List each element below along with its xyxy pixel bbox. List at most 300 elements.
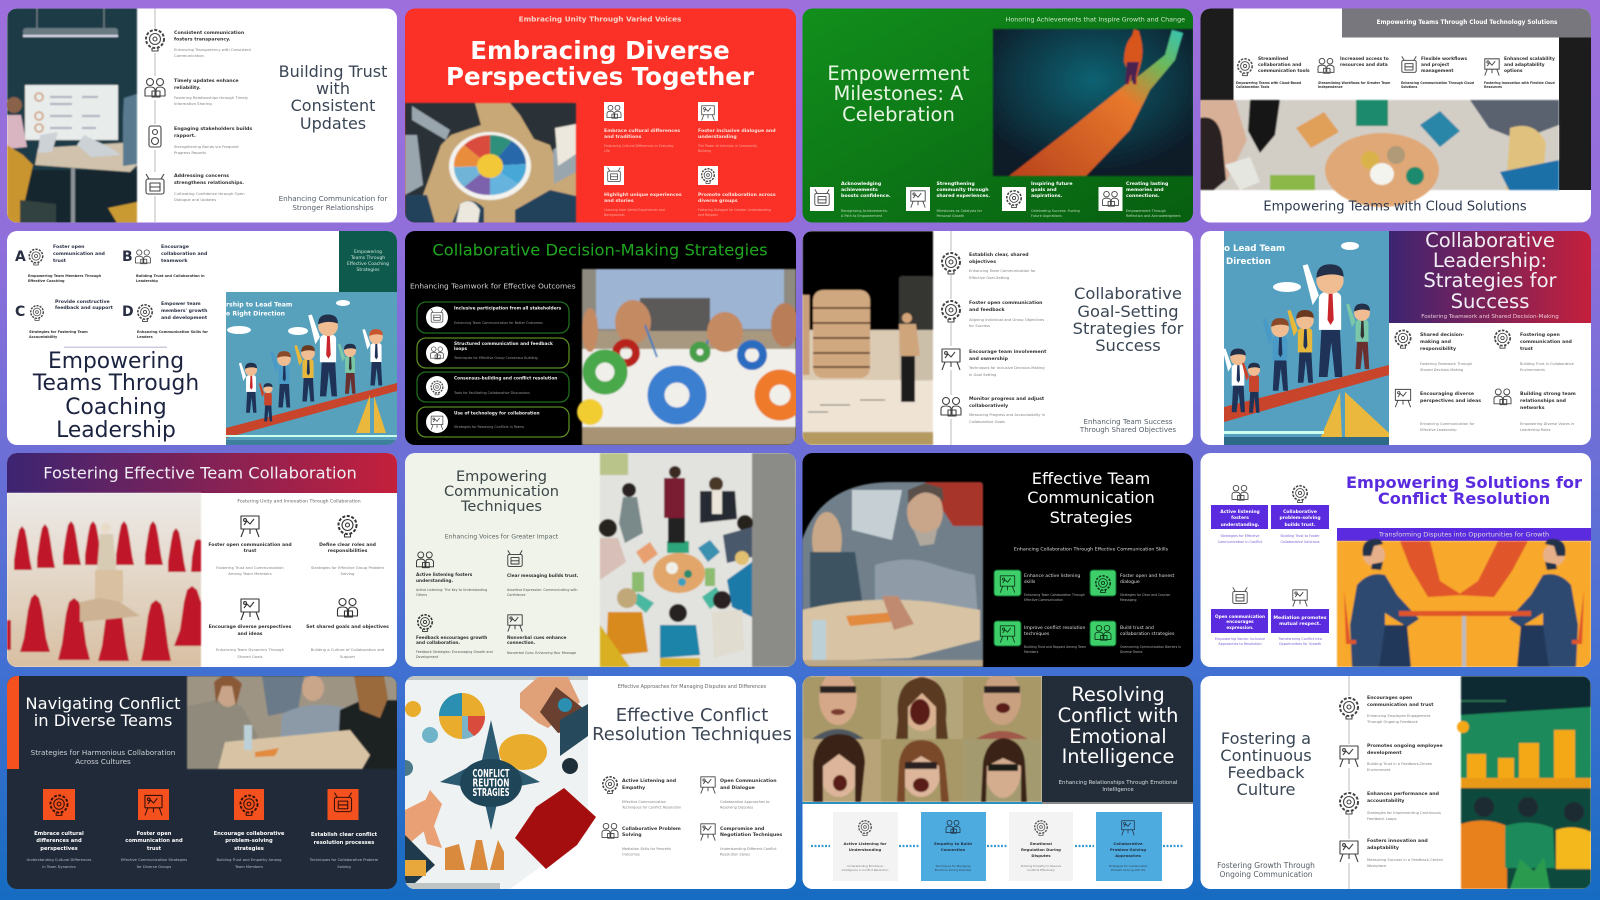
item: memories: Empowerment Through [1126,209,1166,213]
item text: performance: accountability [1367,798,1404,804]
item: diverse perspectives [209,599,292,658]
icon: open communication [939,299,963,323]
item: trust and collaboration: collaboration strategies [1120,630,1175,636]
step: empathy: Connection [941,846,966,852]
item: shared decision-making: Fostering Teamwork Through [1420,362,1472,366]
item text: monitor progress: Monitor progress and adjust [969,396,1045,402]
photo: red pawns around a leader [7,493,201,667]
item: active listening: Active listening fosters [416,572,473,578]
item: active listening: Effective Communication [1024,598,1063,602]
step: collaborative problem-solving: Problem-Solving with EQ [1111,868,1146,872]
item: access to resources: Streamlining Workflows for Greater Team [1318,81,1390,85]
image: cartoon team on a rising plank: rship to Lead Team [226,302,292,308]
item: collaborative problem solving [602,823,681,856]
title: Empowering [456,468,547,484]
panel: Resolving Conflict with Emotional Intelligence [802,671,1193,889]
item: streamlined collaboration [1236,56,1310,89]
item: problem-solving: problem-solving [225,838,273,844]
subtitle: Ongoing Communication [1219,870,1313,878]
item: conflict resolution: Improve conflict resolution [1024,624,1085,630]
item: clear messaging [507,550,579,597]
timeline line [154,8,156,222]
card: collaborative problem-solving: problem-solving [1279,514,1321,520]
item text: addressing concerns: Addressing concerns [174,172,229,178]
item: community: community through [936,186,989,192]
step: collaborative problem-solving: Problem-Solving [1110,846,1146,852]
card: active listening: understanding. [1221,522,1260,528]
item: clear messaging: Assertive Expression: Communicating with [507,588,577,592]
item: team relationships: networks [1520,404,1545,410]
item: open communication: Effective Communication Strategies [121,858,187,862]
item: active listening: skills [1024,578,1036,584]
item: team relationships [1494,389,1576,432]
item: inclusive dialogue: The Power of Inclusion in Community [697,144,757,148]
item text: open communication: for Success [969,324,990,328]
image: cartoon team on a rising plank [226,292,397,445]
card: mediation [1271,590,1329,646]
item D: members' growth [161,308,207,314]
header panel [1042,676,1193,802]
item text: timely updates: Fostering Relationships through Timely [174,94,249,100]
item: clear roles: Strategies for Effective Group Problem [311,564,384,570]
list item: inclusive participation: Enhancing Team Communication for Better Outcomes [454,321,543,325]
card: collaborative problem-solving: Collaborative [1283,508,1317,514]
item: aspirations [1031,180,1080,218]
title: Techniques [460,498,542,514]
title: Strategies [1050,508,1132,526]
item: trust and collaboration: Diverse Teams [1120,650,1143,654]
item: open dialogue [1090,570,1175,602]
item: compromise: Compromise and [720,826,764,832]
item: clear roles: responsibilities [328,548,368,554]
item: clear roles: Define clear roles and [319,542,376,548]
item: trust and collaboration: Build trust and [1120,624,1154,630]
item: community: shared experiences. [936,192,990,198]
item B: B [122,249,133,265]
item A: trust [53,258,67,264]
item text: engaging stakeholders: Strengthening Bonds via Frequent [174,144,239,148]
panel: Fostering Effective Team Collaboration [7,453,397,667]
item: cultural differences: Embrace cultural [34,831,84,837]
red hexagon [515,788,596,869]
icon: timely updates [144,76,166,100]
item: cultural differences [604,128,680,153]
item B [122,244,207,283]
item D: Leaders [137,335,153,339]
item: memories: Creating lasting [1126,180,1168,186]
item: memories [1126,180,1181,218]
item: scalability: options [1504,68,1523,74]
item: compromise: Resolution Styles [720,852,750,856]
item C [15,298,114,339]
item: shared decision-making: Shared Decision-Making [1420,368,1463,372]
item B: teamwork [161,258,188,264]
item: resolution processes [309,789,379,869]
item: nonverbal cues [507,615,576,655]
item: open dialogue: Messaging [1120,598,1136,602]
title: Resolution Techniques [592,724,792,744]
item: cultural differences: differences and [36,838,82,844]
item text: objectives: Establish clear, shared [969,252,1029,258]
item: flexible workflows: Enhancing Communication Through Cloud [1401,81,1474,85]
item: open communication: communication and [125,838,183,844]
item: access to resources [1318,56,1390,89]
item: open dialogue: Foster open and honest [1120,572,1175,578]
item: achievements: Acknowledging [841,180,881,186]
item: collaboration across groups: Fostering Dialogue for Greater Understanding [698,208,771,212]
item: open communication: Building Trust in Collaborative [1520,362,1575,366]
card: mediation: Transforming Conflict into [1277,637,1322,641]
card: mediation: Opportunities for Growth [1279,642,1321,646]
item text: objectives: Enhancing Team Communication for [969,269,1036,273]
item: access to resources: resources and data [1340,62,1388,68]
panel: Collaborative Leadership [1200,228,1591,445]
item text: open communication: and feedback [969,306,1006,312]
item: active listening: Effective Communication [622,800,666,804]
item text: innovation: adaptability [1367,844,1399,850]
item B: Leadership [136,279,158,283]
icon: innovation [1337,839,1361,863]
item A: A [15,249,26,265]
item: open communication [208,516,292,576]
item text: consistent communication: Communication [174,52,205,58]
item: inclusive dialogue: Foster inclusive dialogue and [698,128,776,134]
item: active listening: Enhancing Team Collaboration Through [1024,593,1085,597]
item: open communication: trust [1520,346,1534,352]
item: shared goals [306,598,389,658]
item: inclusive dialogue [697,128,776,153]
item A: Effective Coaching [28,279,65,283]
title: with [316,78,350,98]
item D [122,300,208,339]
title: Milestones: A [833,82,964,104]
item text: team involvement: in Goal Setting [969,373,996,377]
title: Fostering a [1221,728,1311,748]
header band: Strategies for [1423,268,1558,292]
item: active listening: Enhance active listening [1024,572,1080,578]
kicker: Effective Approaches for Managing Disputes and Differences [618,684,767,690]
item: open communication: Foster open communication and [208,542,292,548]
subtitle: Strategies for Harmonious Collaboration [31,748,175,756]
title: Navigating Conflict [25,694,181,712]
item text: open communication: Through Ongoing Feedback [1366,720,1419,724]
item: cultural differences: Embrace cultural differences [604,128,680,134]
icons: four features [1238,56,1499,76]
header band [1342,8,1591,38]
title: Effective Team [1032,468,1150,488]
card: active listening [1211,485,1268,544]
card: active listening: Strategies for Effective [1221,534,1259,538]
list item: technology: Strategies for Resolving Conflicts in Teams [454,425,524,429]
item A: Empowering Team Members Through [28,274,102,278]
item: achievements [841,180,891,218]
subtitle: Through Shared Objectives [1079,424,1176,434]
icon: employee development [1337,744,1361,768]
item: clear messaging: Clear messaging builds trust. [507,572,579,578]
item: unique experiences: Learning from Varied Experiences and [604,208,665,212]
arrows: dotted connectors [811,845,1183,847]
item: diverse perspectives: Shared Goals [237,654,263,658]
item: nonverbal cues: Nonverbal cues enhance [507,634,566,640]
header band: Fostering Teamwork and Shared Decision-Making [1421,314,1559,320]
item: team relationships: Building strong team [1520,390,1576,396]
icons: four white tiles [810,187,1122,211]
header panel: Intelligence [1102,787,1134,793]
item: community: Personal Growth [936,214,964,218]
photo: man speaking at a table [802,482,983,667]
item: unique experiences: Backgrounds [604,213,625,217]
card: mediation: mutual respect. [1279,620,1321,626]
panel: Fostering a Continuous Feedback Culture [1200,676,1591,889]
title: Feedback [1227,762,1305,782]
item: cultural differences: and traditions [604,134,642,140]
item: open communication [121,789,187,869]
item: shared decision-making: Shared decision- [1420,332,1464,338]
title: Perspectives Together [446,62,755,90]
item: conflict resolution: Building Trust and Rapport Among Team [1024,645,1086,649]
step: empathy: Emotions During Disputes [935,868,972,872]
item D: Empower team [161,300,201,306]
title: Empowering Solutions for [1346,472,1582,492]
item: streamlined collaboration: Streamlined [1258,56,1288,62]
photo: circle of people around a wheel [405,103,576,223]
card: open communication: encourages [1226,618,1254,624]
timeline line [950,231,952,445]
item: flexible workflows: management [1421,68,1454,74]
item: cultural differences [27,789,92,869]
subtitle: Enhancing Communication for [279,194,387,202]
step: emotional regulation: Regulation During [1021,846,1061,852]
item: active listening: Active Listening and [622,778,676,784]
item B: Encourage [161,244,189,250]
item: flexible workflows [1401,56,1474,89]
card: collaborative problem-solving: Collaborative Solutions [1280,540,1320,544]
item text: employee development [1367,742,1443,772]
step: emotional regulation: Conflicts Effectively [1027,868,1055,872]
subtitle: Enhancing Collaboration Through Effective Communication Skills [1014,546,1169,552]
item: compromise: Understanding Different Conflict [720,847,777,851]
photo: people at a meeting table [187,675,397,769]
step: collaborative problem-solving: Collaborative [1113,840,1143,846]
panel: Empowering Communication Techniques [405,453,796,667]
item: open communication: communication and [1520,338,1572,344]
item: scalability: Resources [1484,85,1502,89]
item A: communication and [53,250,105,256]
item: active listening: Others [416,593,427,597]
item text: innovation [1367,838,1443,868]
item: resolution processes: Solving [337,865,351,869]
item text: innovation: Workplace [1367,864,1387,868]
item: open communication: Resolving Disputes [720,806,753,810]
list item: technology [417,407,569,437]
title: in Diverse Teams [34,710,172,730]
image: figure walking up glowing stairs [993,29,1193,176]
item: streamlined collaboration: Collaboration Tools [1236,85,1270,89]
header band [1389,228,1591,323]
item text: employee development: Building Trust in a Feedback-Driven [1367,762,1433,766]
list item: structured communication: loops [454,346,467,352]
item: team relationships: Leadership Roles [1520,428,1551,432]
item: shared decision-making [1395,330,1472,372]
item: conflict resolution [994,621,1086,654]
item: active listening [416,552,487,597]
item text: engaging stakeholders: Progress Reports [174,150,206,154]
step: emotional regulation: Emotional [1030,840,1052,846]
icon: engaging stakeholders [148,124,162,150]
item: achievements: achievements [841,186,878,192]
item: feedback: Feedback Strategies: Encouraging Growth and [416,650,493,654]
item: cultural differences: perspectives [40,846,78,852]
item text: monitor progress: Collaborative Goals [969,420,1005,424]
item: aspirations: Inspiring future [1031,180,1073,186]
item: feedback [416,615,493,659]
item: flexible workflows: Solutions [1401,85,1417,89]
title: Embracing Diverse [470,36,730,64]
panel: Building Trust with Consistent Updates [6,8,397,223]
item: active listening: Active Listening: The Key to Understanding [416,588,487,592]
item text: open communication: Aligning Individual and Group Objectives [969,318,1044,322]
item: feedback: Development [416,655,439,659]
illustration: bar chart above seated audience [1457,676,1591,889]
photo: wooden coins and figurine [802,231,933,445]
item: flexible workflows: Flexible workflows [1421,56,1467,62]
illustration: two negotiators at a table [1337,539,1591,667]
item: diverse perspectives: Encourage diverse perspectives [209,624,292,630]
item text: performance [1367,790,1441,821]
photo: hands drawing gears [577,269,799,445]
item C: Strategies for Fostering Team [29,330,88,334]
item: access to resources: Independence [1318,85,1343,89]
item: open communication: Open Communication [720,778,777,784]
header panel: Intelligence [1062,744,1174,768]
item: community: Strengthening [936,180,975,186]
compass labels: STRAGIES [472,787,510,799]
item: problem-solving: Building Trust and Empathy Among [216,858,282,862]
item: shared goals: Support [340,654,356,658]
item: achievements: A Path to Empowerment [841,214,883,218]
title: Success [1095,336,1161,354]
list item: inclusive participation: Inclusive participation from all stakeholders [454,306,562,312]
item text: innovation: Measuring Success in a Feedback-Centric [1367,858,1443,862]
title: Communication [1027,488,1155,506]
item: feedback: and collaboration. [416,640,460,646]
item: active listening: Techniques for Conflict Resolution [621,806,681,810]
panel: Empowering Teams with Cloud Solutions [1200,8,1591,222]
subtitle: Fostering Unity and Innovation Through Collaboration [237,498,361,504]
step: collaborative problem-solving: Approaches [1115,852,1142,858]
item text: addressing concerns: Cultivating Confidence through Open [174,190,245,196]
item: clear roles: Solving [341,570,355,576]
item text: objectives: objectives [969,258,996,264]
step: collaborative problem-solving [1096,812,1162,881]
item D: D [122,304,134,320]
item B: collaboration and [161,250,207,256]
item B: Building Trust and Collaboration in [136,274,205,278]
item: active listening: understanding. [416,578,453,584]
item text: engaging stakeholders [174,126,252,154]
item: diverse perspectives: perspectives and ideas [1420,398,1481,404]
list item: structured communication: Structured communication and feedback [454,340,553,346]
card: active listening: Communication in Conflict [1218,540,1263,544]
item text: addressing concerns: Dialogue and Updates [174,196,216,202]
item A: Foster open [53,244,84,250]
item: scalability: and adaptability [1504,62,1545,68]
card: collaborative problem-solving [1271,486,1329,544]
item: aspirations: Future Aspirations [1031,214,1062,218]
item: diverse perspectives: Enhancing Team Dynamics Through [216,646,285,652]
icon: objectives [939,251,963,275]
icon: performance [1337,791,1361,815]
item text: timely updates: reliability. [174,84,201,90]
image: cartoon team on a rising plank: e Right Direction [226,310,285,318]
title: Conflict Resolution [1378,488,1550,508]
item: open communication: Foster open [137,831,172,837]
title: Goal-Setting [1077,302,1179,320]
item: collaborative problem solving: Solving [622,832,642,838]
item text: consistent communication: Consistent communication [174,30,244,36]
item: unique experiences: and stories [604,198,634,204]
item C: C [15,304,25,320]
item text: objectives [969,252,1036,280]
item text: open communication: communication and trust [1367,702,1434,708]
item: conflict resolution: Members [1024,650,1039,654]
item: resolution processes: Establish clear conflict [311,832,378,838]
item: open communication [1495,330,1575,372]
item text: team involvement: Encourage team involvement [969,348,1047,354]
item text: addressing concerns: strengthens relationships. [174,180,244,186]
item text: consistent communication: Enhancing Transparency with Consistent [174,46,252,52]
header band: Empowering Teams Through Cloud Technology Solutions [1377,20,1558,26]
header panel: Enhancing Relationships Through Emotional [1059,780,1177,786]
card: open communication: Open communication [1215,614,1265,618]
title: Empowerment [827,62,970,84]
subtitle: Enhancing Teamwork for Effective Outcomes [410,282,576,290]
card: open communication: Approaches to Resolution [1218,642,1262,646]
icons: four white tiles [604,102,718,185]
item: conflict resolution: techniques [1024,630,1050,636]
item: open communication [701,777,777,810]
item: aspirations: Celebrating Success: Fueling [1031,209,1080,213]
item text: open communication: Encourages open [1367,694,1412,700]
title: Strategies for [1073,318,1184,338]
item text: timely updates [174,78,249,106]
title: Effective Conflict [616,704,768,726]
item: problem-solving [214,789,285,869]
icon: consistent communication [145,29,165,53]
panel: Effective Conflict Resolution Techniques [397,676,796,889]
item text: objectives: Effective Goal-Setting [969,276,1009,280]
title: Collaborative Decision-Making Strategies [432,240,768,260]
item text: open communication: Foster open communication [969,300,1043,306]
caption: Empowering Teams with Cloud Solutions [1263,200,1527,214]
item: open communication: trust [244,548,257,554]
item: community [936,180,990,218]
item: active listening [994,570,1085,602]
title: Culture [1237,780,1295,798]
subtitle: Stronger Relationships [292,202,374,212]
item: collaboration across groups [698,192,776,217]
item: problem-solving: strategies [234,846,264,852]
step: active listening: Understanding Emotional [847,864,883,868]
item: open communication: Fostering Trust and Communication [216,564,284,570]
panel: Empowerment Milestones [802,8,1193,222]
item: open communication: and Dialogue [720,784,755,790]
item text: performance: Enhances performance and [1367,790,1439,796]
icon: monitor progress [939,395,963,419]
item: flexible workflows: and project [1421,62,1449,68]
item: nonverbal cues: Nonverbal Cues: Enhancing Your Message [507,651,576,655]
item: memories: Reflection and Acknowledgment [1126,214,1181,218]
